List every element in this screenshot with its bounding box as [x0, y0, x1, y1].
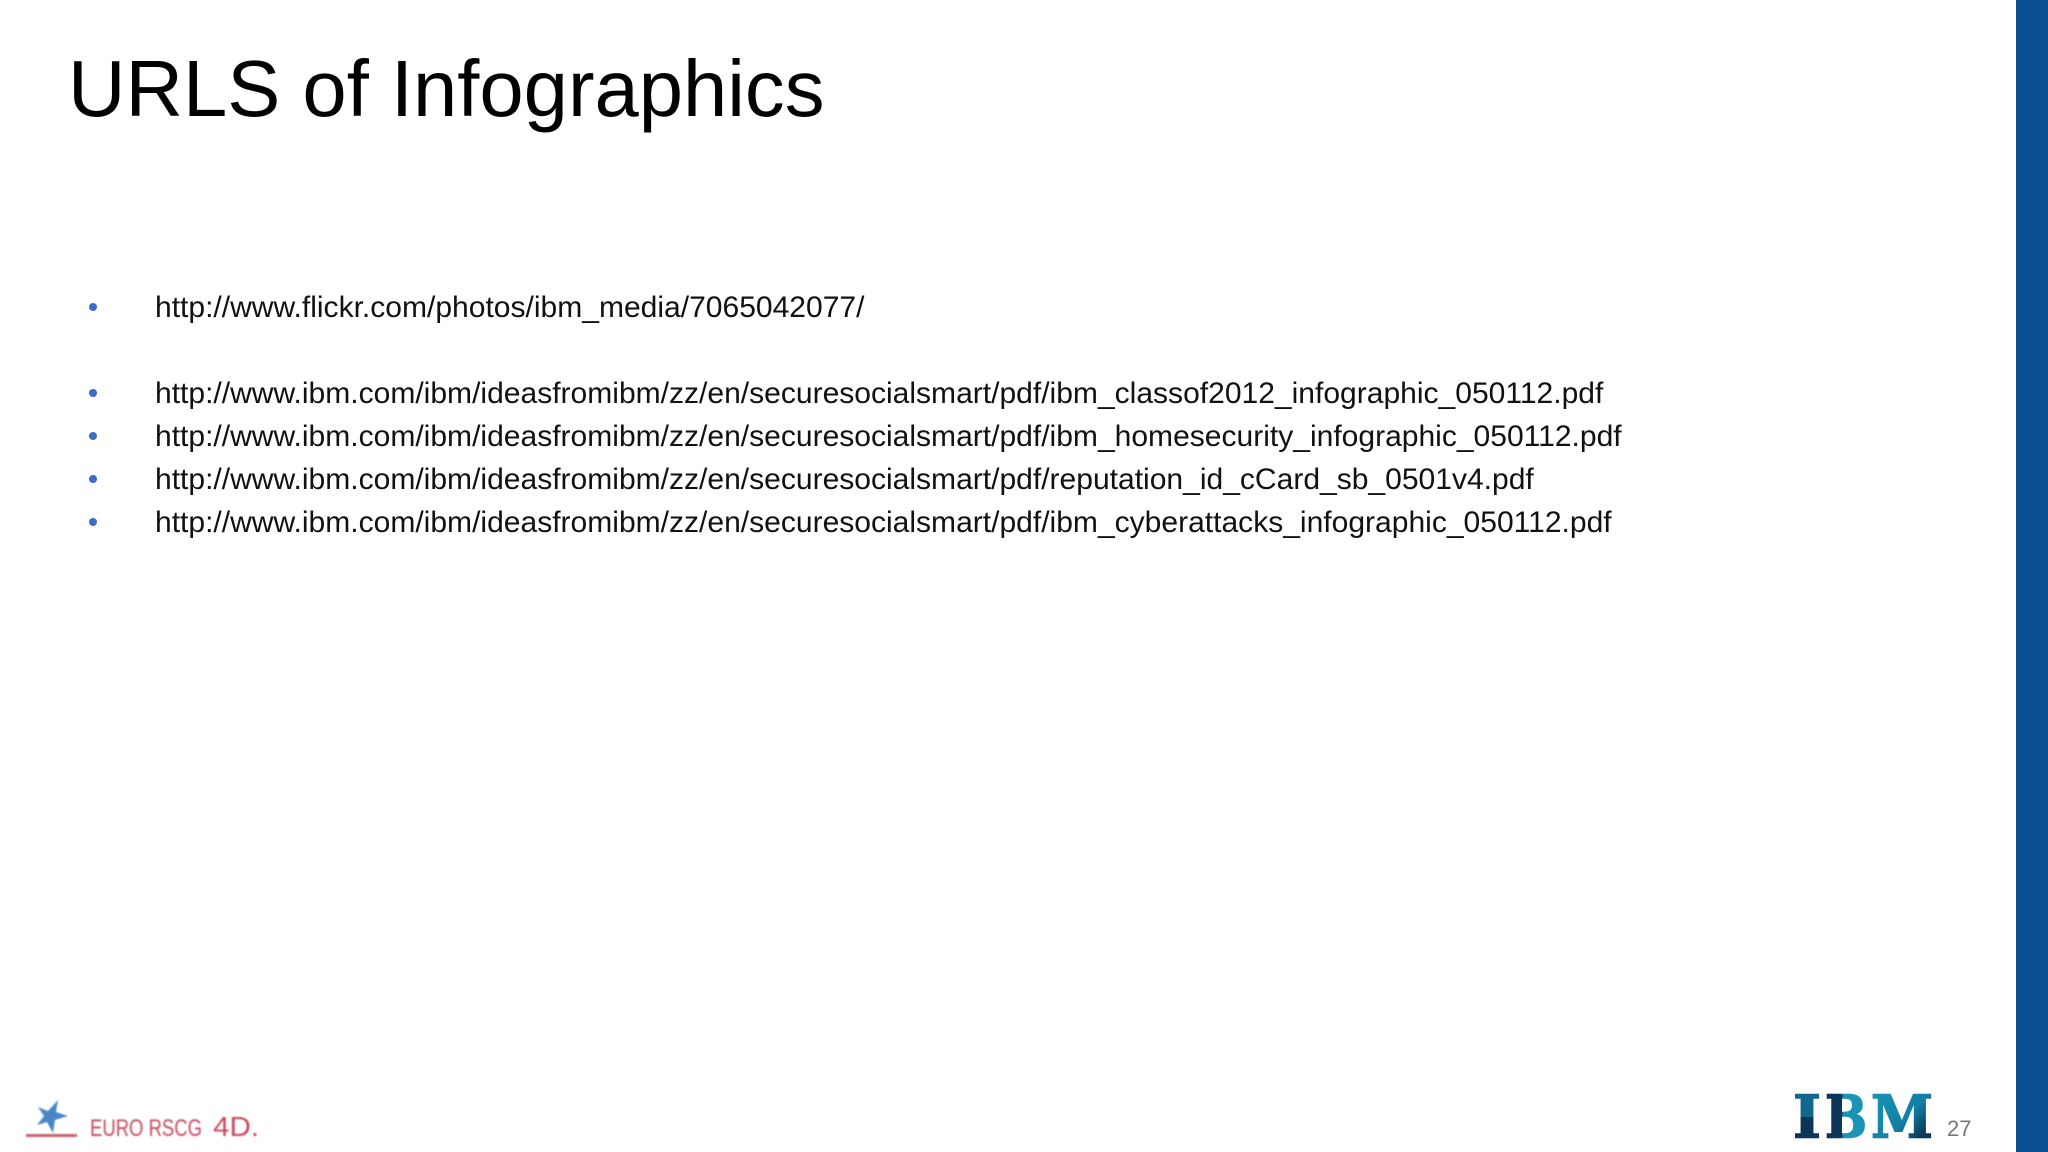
icon: red underline: [26, 1134, 77, 1137]
logo text: EURO RSCG: [90, 1115, 202, 1142]
logo: IBM: [1793, 1088, 1933, 1146]
icon: blue star: [37, 1100, 68, 1133]
list item: home security PDF URL: http://www.ibm.com/ibm/ideasfromibm/zz/en/securesocialsmart/pdf/ibm_homesecurity_infographic_050112.pdf: [155, 420, 1622, 453]
page number: 27: [1947, 1116, 1971, 1141]
title: URLS of Infographics: [68, 44, 825, 133]
list item: flickr URL: http://www.flickr.com/photos/ibm_media/7065042077/: [155, 291, 864, 324]
list item: class of 2012 PDF URL: http://www.ibm.com/ibm/ideasfromibm/zz/en/securesocialsmart/pdf/ibm_classof2012_infographic_050112.pdf: [155, 377, 1603, 410]
list item: cyberattacks PDF URL: http://www.ibm.com/ibm/ideasfromibm/zz/en/securesocialsmart/pdf/ibm_cyberattacks_infographic_050112.pdf: [155, 506, 1612, 539]
logo: Euro RSCG 4D: 4D.: [213, 1111, 259, 1142]
logo: Euro RSCG 4D: [25, 1100, 259, 1142]
sidebar: blue vertical band: [2016, 0, 2048, 1152]
list of infographic URLs: [89, 291, 1622, 539]
list item: reputation card PDF URL: http://www.ibm.com/ibm/ideasfromibm/zz/en/securesocialsmart/pdf/reputation_id_cCard_sb_0501v4.pdf: [155, 463, 1534, 496]
